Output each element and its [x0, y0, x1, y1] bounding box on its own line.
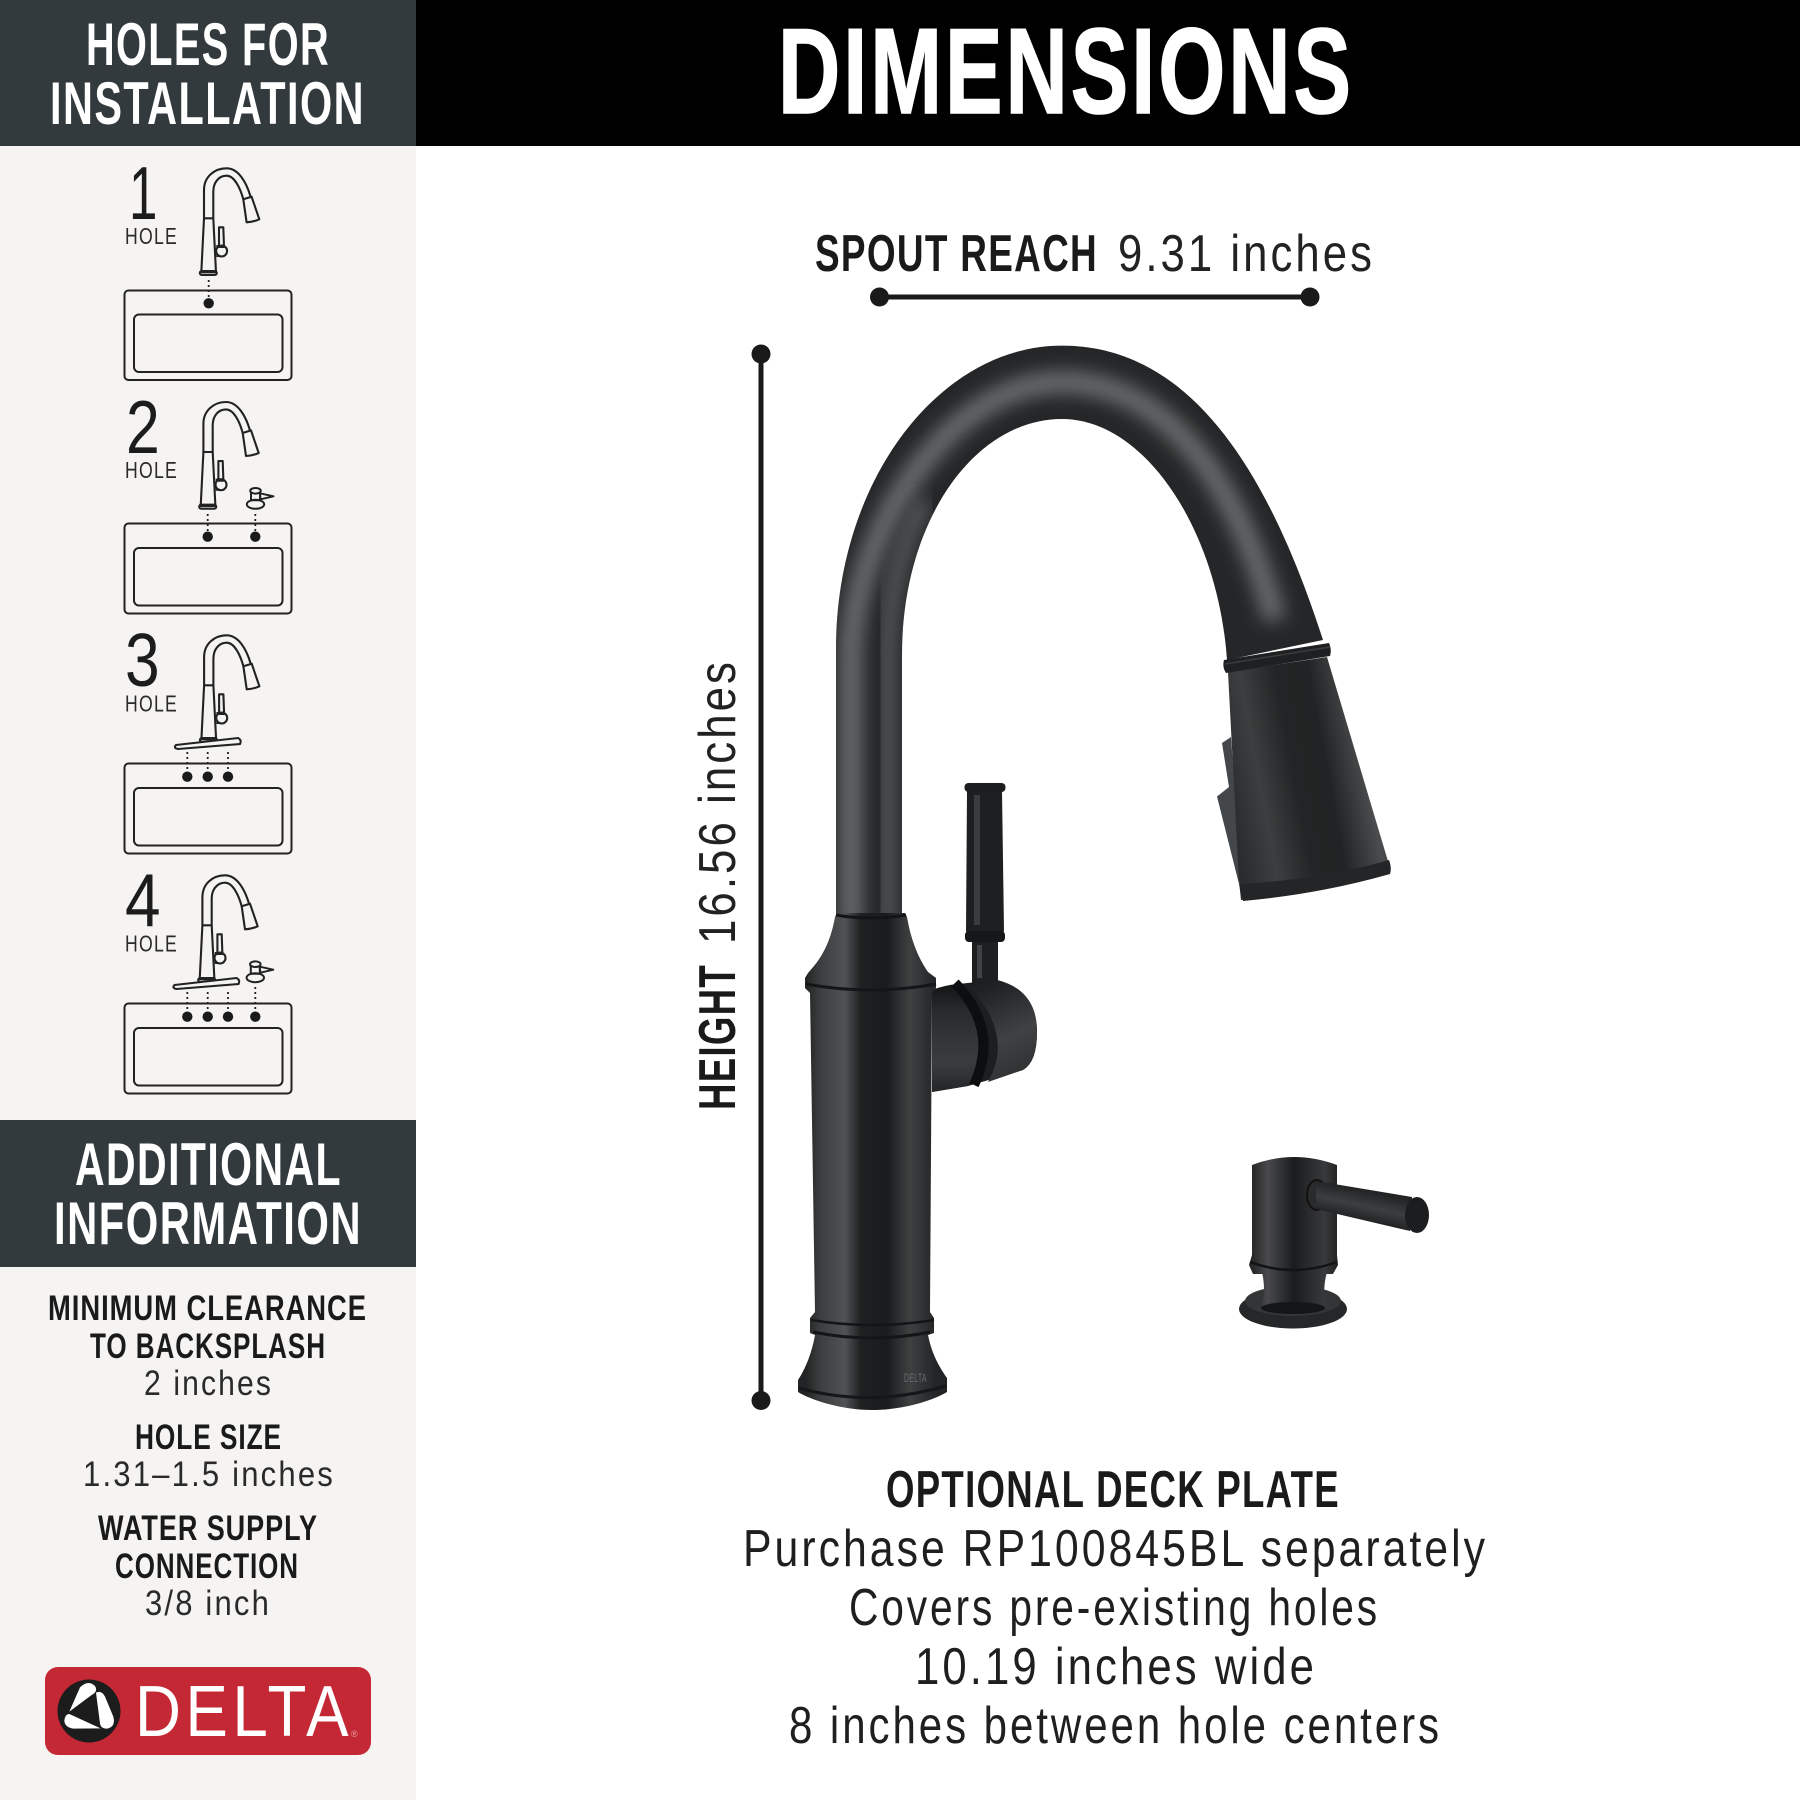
panel: 2 hole option: [124, 385, 292, 614]
dimension line: spout reach: [870, 288, 1320, 306]
faucet illustration: [798, 346, 1391, 1410]
text block: hole size: 1.31–1.5 inches: [83, 1455, 335, 1494]
faucet body: [798, 913, 947, 1410]
label: height: 16.56 inches: [689, 659, 747, 944]
heading: holes for installation: [0, 0, 416, 146]
text block: optional deck plate: OPTIONAL DECK PLATE: [886, 1461, 1340, 1519]
heading: additional information: INFORMATION: [54, 1190, 362, 1257]
logo: delta: DELTA: [135, 1672, 353, 1752]
text block: minimum clearance: TO BACKSPLASH: [90, 1327, 326, 1366]
heading: holes for installation: HOLES FOR: [86, 11, 330, 78]
heading: additional information: ADDITIONAL: [75, 1131, 342, 1198]
handle hub: [932, 980, 1037, 1092]
heading: dimensions: [416, 0, 1800, 146]
text block: optional deck plate: [743, 1461, 1488, 1755]
panel: 1 hole option: 1: [129, 151, 161, 235]
text block: minimum clearance: 2 inches: [144, 1364, 273, 1403]
panel: 4 hole option: [124, 858, 292, 1094]
spray head: [1217, 643, 1391, 901]
panel: 1 hole option: HOLE: [125, 223, 178, 249]
panel: 2 hole option: 2: [126, 385, 164, 469]
text block: optional deck plate: 10.19 inches wide: [915, 1638, 1317, 1696]
label: spout reach: 9.31 inches: [1118, 225, 1375, 283]
panel: 3 hole option: 3: [125, 618, 164, 702]
text block: optional deck plate: Covers pre-existing holes: [849, 1579, 1380, 1637]
text block: water supply connection: [98, 1509, 318, 1623]
heading: dimensions: DIMENSIONS: [778, 3, 1354, 139]
label: spout reach: SPOUT REACH: [815, 225, 1098, 283]
text block: optional deck plate: 8 inches between hole centers: [789, 1697, 1442, 1755]
panel: 3 hole option: [124, 618, 292, 854]
soap dispenser illustration: [1239, 1157, 1429, 1328]
text block: water supply connection: 3/8 inch: [145, 1584, 271, 1623]
logo: delta: [45, 1667, 371, 1755]
spout tube: [836, 346, 1323, 930]
handle lever: [964, 783, 1006, 985]
text block: water supply connection: WATER SUPPLY: [98, 1509, 318, 1548]
label: height: [689, 659, 747, 1110]
sidebar panel: [0, 0, 416, 1800]
heading: additional information: [0, 1120, 416, 1267]
label: height: HEIGHT: [689, 964, 747, 1110]
panel: 2 hole option: HOLE: [125, 457, 178, 483]
heading: holes for installation: INSTALLATION: [50, 70, 365, 137]
dimension line: height: [752, 344, 770, 1410]
text block: minimum clearance: MINIMUM CLEARANCE: [48, 1289, 367, 1328]
panel: 1 hole option: [124, 151, 292, 380]
faucet body: DELTA: [904, 1371, 927, 1385]
logo: delta: ®: [351, 1729, 358, 1739]
panel: 4 hole option: 4: [125, 858, 165, 942]
text block: minimum clearance: [48, 1289, 367, 1403]
panel: 3 hole option: HOLE: [125, 691, 178, 717]
text block: hole size: [83, 1418, 335, 1494]
text block: optional deck plate: Purchase RP100845BL separately: [743, 1520, 1488, 1578]
text block: hole size: HOLE SIZE: [135, 1418, 282, 1457]
panel: 4 hole option: HOLE: [125, 931, 178, 957]
text block: water supply connection: CONNECTION: [115, 1547, 299, 1586]
